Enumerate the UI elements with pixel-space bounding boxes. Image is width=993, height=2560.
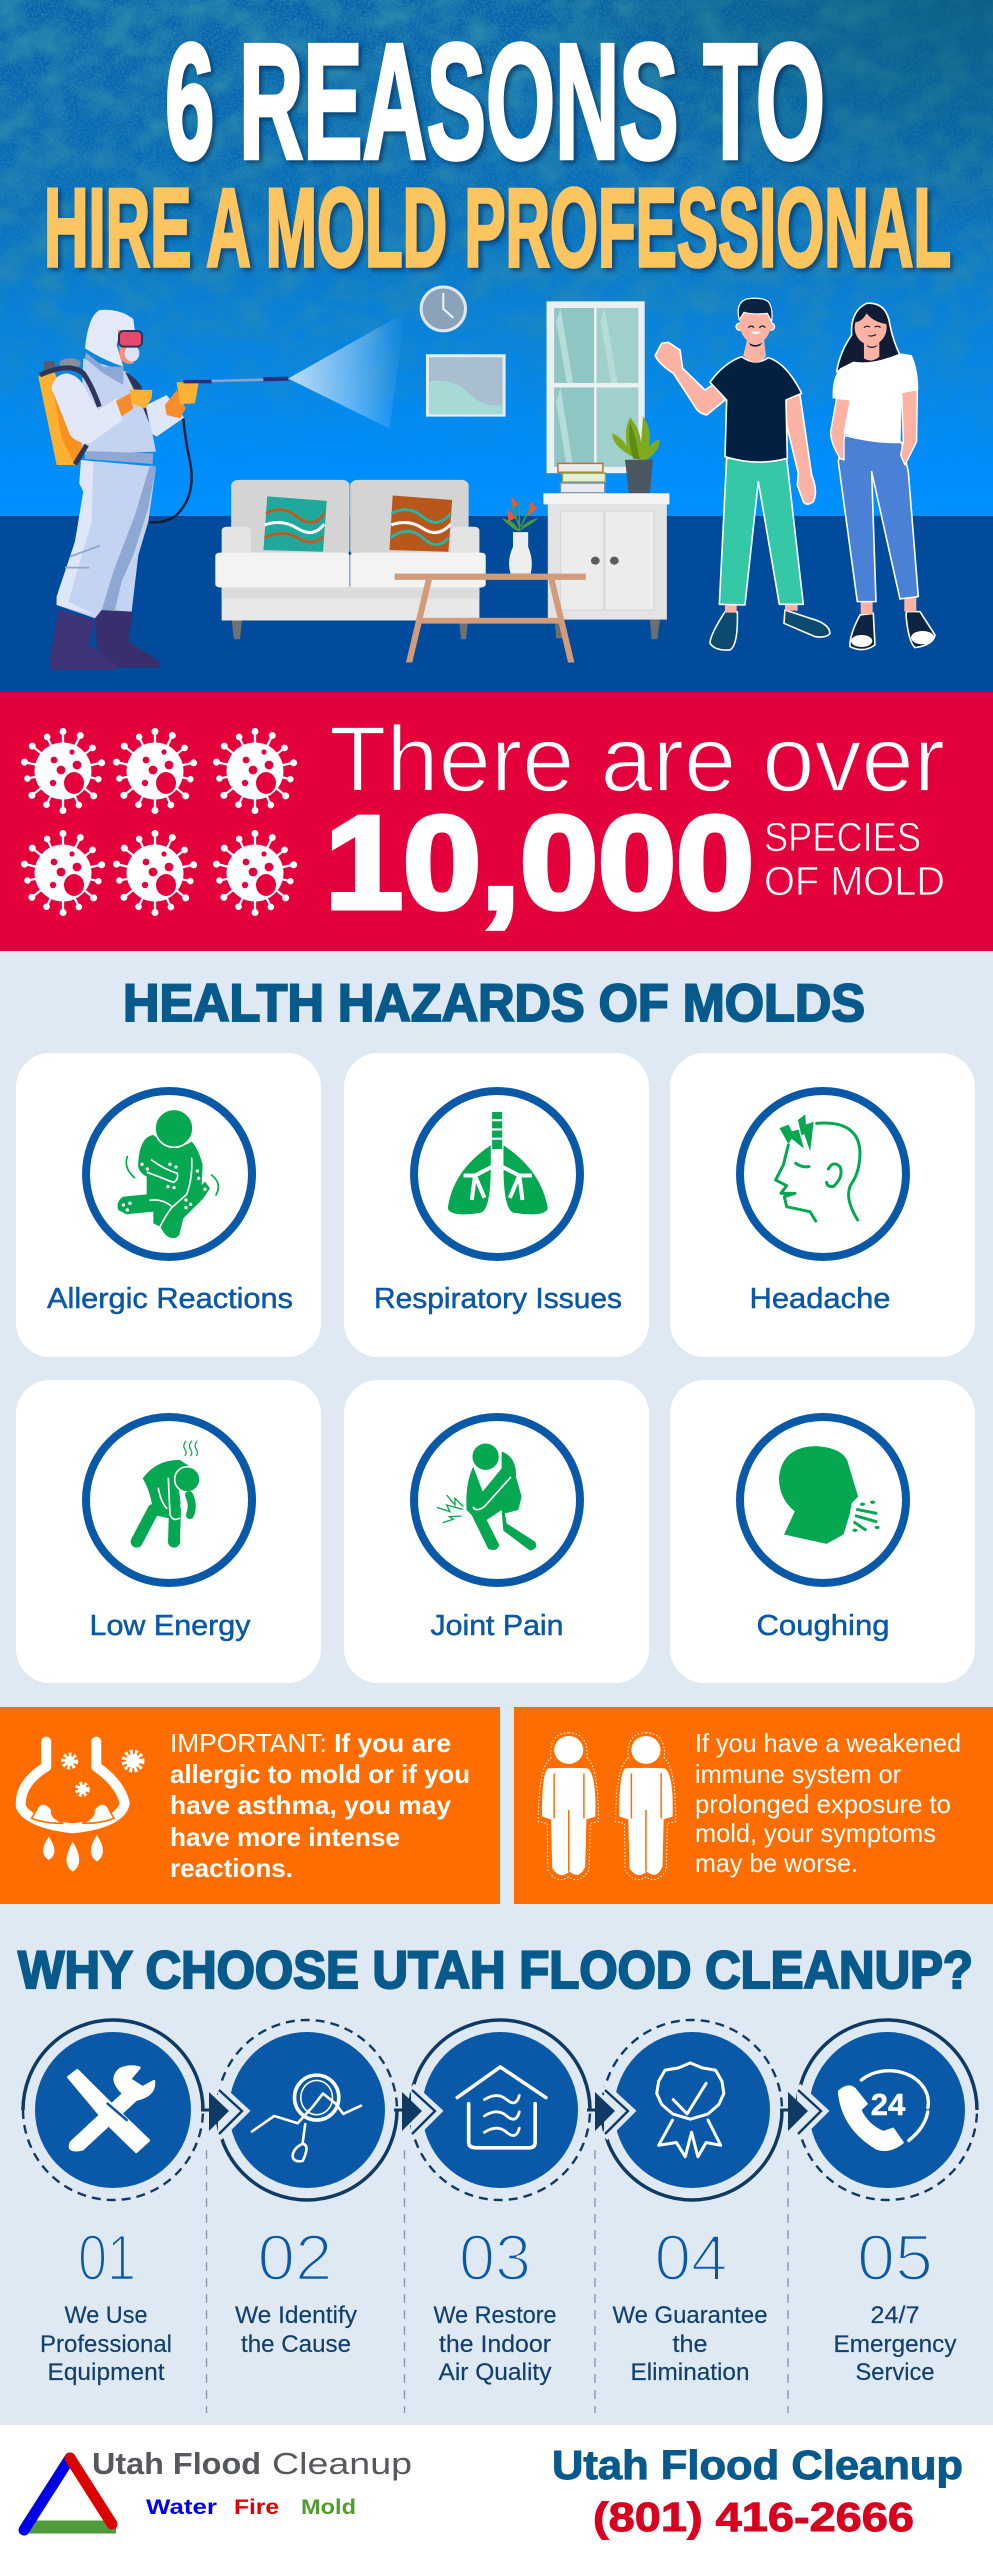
step 4 badge: [602, 2020, 782, 2200]
wall picture: [427, 356, 504, 415]
woman head: [864, 340, 879, 360]
window: [547, 301, 645, 473]
panel: health hazard cards: [16, 1053, 975, 1683]
step 5 text: 24/7: [870, 2302, 920, 2329]
far glove and spray gun: [165, 390, 186, 418]
woman trousers: [838, 435, 918, 602]
icon: coughing head: [779, 1446, 880, 1544]
icon: house air quality: [457, 2067, 546, 2148]
footer: [0, 2425, 993, 2560]
man: [655, 298, 830, 650]
icon: guarantee badge: [657, 2063, 724, 2157]
card: low energy: [16, 1380, 321, 1683]
pillow teal: [263, 496, 327, 552]
icon: lungs: [448, 1112, 548, 1214]
icon: 24/7 phone: [839, 2071, 928, 2150]
step 2 badge: [217, 2020, 397, 2200]
step 1 text: Equipment: [48, 2359, 165, 2386]
near glove: [116, 393, 133, 417]
card: respiratory issues: Respiratory Issues: [374, 1283, 622, 1315]
heading: health hazards: HEALTH HAZARDS OF MOLDS: [123, 974, 865, 1033]
card: headache: Headache: [750, 1283, 890, 1315]
banner text: OF MOLD: [764, 858, 945, 904]
icon: magnifier over graph: [252, 2075, 361, 2161]
far arm: [147, 395, 184, 437]
books: [558, 463, 605, 493]
card: coughing: [670, 1380, 975, 1683]
worker in protective suit: [38, 310, 288, 670]
step 4 text: the: [672, 2331, 708, 2358]
wall clock: [421, 287, 465, 331]
potted plant: [612, 416, 660, 493]
step 3 text: [434, 2221, 556, 2386]
banner text: 10,000: [325, 789, 754, 936]
vase with flowers: [502, 496, 538, 574]
step 1 badge: [23, 2020, 203, 2200]
man t-shirt: [710, 357, 802, 462]
callout text: [170, 1728, 470, 1883]
spray cone: [288, 312, 405, 429]
spray lance: [183, 379, 288, 382]
near arm: [52, 373, 123, 443]
woman: [831, 303, 935, 650]
title: [44, 10, 951, 290]
24 label in phone icon: 24: [871, 2087, 906, 2122]
step 4 text: We Guarantee: [612, 2302, 768, 2329]
woman hair: [837, 303, 900, 372]
woman arms: [831, 398, 851, 460]
step text: [40, 2221, 956, 2386]
card: joint pain: [344, 1380, 649, 1683]
card: allergic reactions: [16, 1053, 321, 1357]
woman top: [833, 353, 918, 442]
card: low energy: Low Energy: [90, 1610, 251, 1642]
icon: headache: [776, 1115, 860, 1221]
step 4 text: 04: [654, 2221, 728, 2294]
callout text: have asthma, you may: [170, 1790, 452, 1820]
logo wordmark: Fire: [234, 2496, 279, 2519]
goggles: [119, 331, 142, 347]
face and mask: [118, 330, 135, 364]
logo wordmark: Utah Flood: [92, 2446, 261, 2481]
step 5 text: [834, 2221, 956, 2386]
couple standing: [655, 298, 935, 650]
callout: weakened immune system: [514, 1707, 993, 1904]
callout text: mold, your symptoms: [695, 1818, 936, 1848]
man trousers: [719, 458, 803, 605]
man waving arm: [655, 342, 725, 415]
callout text: prolonged exposure to: [695, 1789, 951, 1819]
icon: joint pain: [437, 1443, 536, 1551]
card: respiratory issues: [344, 1053, 649, 1357]
step 4 text: Elimination: [630, 2359, 750, 2386]
banner text: SPECIES: [764, 814, 921, 860]
callout: allergy warning: [0, 1707, 500, 1904]
step 5 text: 05: [857, 2221, 933, 2294]
icon: tools: [68, 2067, 154, 2152]
callout text: have more intense: [170, 1822, 400, 1852]
callout text: [695, 1728, 961, 1878]
step 4 text: [612, 2221, 768, 2386]
panel: five reasons steps: [23, 2020, 977, 2200]
card: allergic reactions: Allergic Reactions: [47, 1283, 293, 1315]
step 1 text: [40, 2221, 172, 2386]
logo wordmark: [92, 2446, 412, 2519]
dashed column dividers: [206, 2150, 788, 2413]
card: coughing: Coughing: [756, 1610, 890, 1642]
banner: 10,000 species of mold: [0, 692, 993, 951]
collar: [85, 352, 123, 385]
boots: [49, 610, 117, 670]
step 2 text: the Cause: [241, 2331, 351, 2358]
wall decor and furniture: [215, 287, 669, 662]
logo wordmark: Water: [146, 2496, 217, 2519]
step 5 text: Service: [856, 2359, 934, 2386]
step icons: [68, 2063, 928, 2161]
callout text: may be worse.: [695, 1848, 858, 1878]
step 3 text: We Restore: [434, 2302, 556, 2329]
step 5 badge: [797, 2020, 977, 2200]
footer contact: (801) 416-2666: [593, 2494, 914, 2540]
woman shoes: [850, 613, 875, 650]
icon: two figures with dotted aura: [538, 1733, 676, 1880]
hero panel: room scene: [0, 0, 993, 692]
man right arm: [785, 395, 815, 504]
arrows between steps: [201, 2087, 823, 2137]
backpack strap: [40, 368, 99, 407]
banner text: [325, 707, 945, 936]
step 2 text: [235, 2221, 357, 2358]
wall background: [0, 0, 993, 517]
man shoes: [710, 612, 737, 650]
belt: [85, 451, 153, 464]
icon: allergic person: [118, 1109, 218, 1238]
hose: [149, 418, 192, 522]
card: joint pain: Joint Pain: [430, 1610, 564, 1642]
callout text: allergic to mold or if you: [170, 1759, 470, 1789]
card: headache: [670, 1053, 975, 1357]
footer contact: [552, 2442, 963, 2540]
logo wordmark: Cleanup: [272, 2446, 412, 2481]
callout text: If you have a weakened: [695, 1728, 961, 1758]
step 2 text: 02: [258, 2221, 332, 2294]
suit legs: [57, 460, 156, 618]
cabinet: [543, 493, 669, 639]
step 3 text: the Indoor: [439, 2331, 551, 2358]
step 1 text: Professional: [40, 2331, 172, 2358]
step 2 text: We Identify: [235, 2302, 357, 2329]
step 1 text: We Use: [64, 2302, 148, 2329]
banner text: There are over: [329, 707, 945, 811]
virus icons: [20, 728, 298, 916]
man head: [743, 338, 766, 362]
sprayer tank: [38, 358, 87, 465]
icon: nose with allergens: [21, 1742, 140, 1872]
hood: [85, 310, 135, 367]
pillow orange: [389, 496, 452, 552]
sofa: [215, 480, 486, 639]
logo wordmark: Mold: [301, 2496, 356, 2519]
logo triangle: [24, 2458, 116, 2530]
callout text: immune system or: [695, 1759, 901, 1789]
callout text: reactions.: [170, 1853, 293, 1883]
callout text: IMPORTANT: If you are: [170, 1728, 451, 1758]
step 3 text: 03: [459, 2221, 531, 2294]
step 1 text: 01: [78, 2221, 136, 2294]
step 3 badge: [410, 2020, 590, 2200]
step 3 text: Air Quality: [438, 2359, 552, 2386]
step 5 text: Emergency: [834, 2331, 956, 2358]
floor: [0, 516, 993, 692]
torso: [80, 358, 156, 454]
coffee table: [395, 574, 586, 662]
icon: low energy: [137, 1441, 200, 1542]
footer contact: Utah Flood Cleanup: [552, 2442, 963, 2488]
